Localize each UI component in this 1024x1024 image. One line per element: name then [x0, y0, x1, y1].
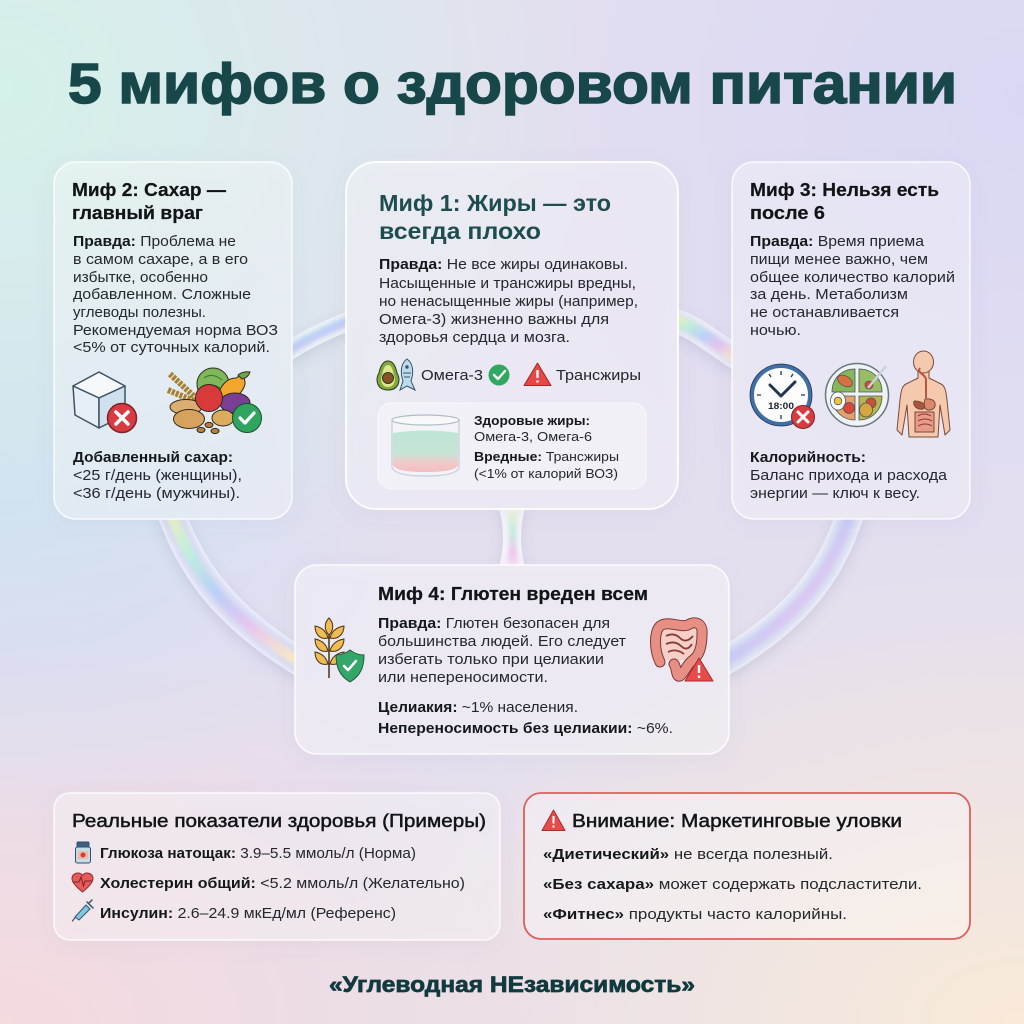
row: insulin: Инсулин: 2.6–24.9 мкЕд/мл (Референс): [100, 905, 396, 922]
text: myth 1 truth: Правда: Не все жиры одинаковы.: [379, 256, 628, 273]
panel: myth 1 fats: [346, 162, 678, 509]
icon: bottle: [76, 842, 90, 863]
panel: health indicators: [54, 793, 500, 940]
text: myth 4 truth: или непереносимости.: [378, 669, 548, 686]
row: glucose: Глюкоза натощак: 3.9–5.5 ммоль/л (Норма): [100, 845, 416, 862]
heading: myth 3: после 6: [750, 203, 825, 223]
text: myth 4 truth: Правда: Глютен безопасен для: [378, 615, 610, 632]
icon: balanced plate: [826, 364, 888, 426]
text: calories: энергии — ключ к весу.: [750, 485, 920, 502]
text: added sugar limits: <36 г/день (мужчины).: [73, 485, 240, 502]
heading: myth 2: главный враг: [72, 203, 204, 223]
icon: sugar cube with cross: [73, 372, 136, 432]
text: added sugar limits: Добавленный сахар:: [73, 449, 233, 466]
text: calories: Баланс прихода и расхода: [750, 467, 948, 484]
text: myth 3 truth: Правда: Время приема: [750, 233, 925, 250]
icon: healthy carbs with check: [168, 368, 262, 434]
row: insulin: [72, 900, 396, 922]
heading: myth 3: Миф 3: Нельзя есть: [750, 180, 939, 200]
icon: intestine with warning: [656, 623, 713, 681]
text: fats comparison: Омега-3, Омега-6: [474, 430, 592, 444]
text: myth 3 truth: ночью.: [750, 322, 801, 339]
text: marketing claims: [543, 846, 922, 923]
heading: myth 3: [750, 180, 939, 223]
icon: heart: [72, 873, 93, 892]
text: myth 1 truth: Насыщенные и трансжиры вредны,: [379, 275, 636, 292]
text: marketing claims: «Диетический» не всегда полезный.: [543, 846, 833, 863]
heading: myth 1: [379, 190, 611, 244]
text: myth 3 truth: за день. Метаболизм: [750, 286, 908, 303]
icon: avocado: [377, 361, 399, 390]
panel: myth 2 sugar: [54, 162, 292, 519]
icon: warning triangle: [524, 363, 551, 386]
text: prevalence: [378, 699, 673, 737]
text: myth 3 truth: не останавливается: [750, 304, 899, 321]
text: myth 2 truth: <5% от суточных калорий.: [73, 339, 270, 356]
text: fats comparison: (<1% от калорий ВОЗ): [474, 467, 618, 481]
text: fats comparison: [474, 414, 619, 481]
text: myth 2 truth: Рекомендуемая норма ВОЗ: [73, 322, 278, 339]
text: myth 4 truth: [378, 615, 626, 686]
icon: digestive system body: [897, 351, 950, 437]
text: added sugar limits: [73, 449, 242, 502]
text: myth 2 truth: углеводы полезны.: [73, 304, 206, 321]
text: prevalence: Целиакия: ~1% населения.: [378, 699, 578, 716]
heading: myth 4: Миф 4: Глютен вреден всем: [378, 584, 648, 604]
icon: syringe: [72, 900, 93, 921]
icon: warning triangle: [542, 810, 565, 830]
text: myth 2 truth: [73, 233, 278, 356]
text: myth 2 truth: добавленном. Сложные: [73, 286, 251, 303]
label: trans fats: Трансжиры: [556, 367, 641, 384]
text: calories: Калорийность:: [750, 449, 866, 466]
panel: marketing warning: [524, 793, 970, 939]
text: myth 3 truth: общее количество калорий: [750, 269, 955, 286]
text: myth 1 truth: но ненасыщенные жиры (например,: [379, 293, 638, 310]
heading: myth 1: Миф 1: Жиры — это: [379, 190, 611, 216]
footer brand: «Углеводная НЕзависимость»: [329, 972, 695, 997]
text: prevalence: Непереносимость без целиакии: ~6%.: [378, 720, 673, 737]
text: fats comparison: Вредные: Трансжиры: [474, 450, 619, 464]
text: myth 1 truth: [379, 256, 638, 346]
text: fats comparison: Здоровые жиры:: [474, 414, 590, 428]
text: added sugar limits: <25 г/день (женщины),: [73, 467, 242, 484]
icon: glass layered: [392, 415, 459, 476]
panel: myth 3 late eating: [732, 162, 970, 519]
text: marketing claims: «Без сахара» может содержать подсластители.: [543, 876, 922, 893]
text: myth 4 truth: большинства людей. Его следует: [378, 633, 626, 650]
text: myth 4 truth: избегать только при целиакии: [378, 651, 604, 668]
text: myth 1 truth: здоровья сердца и мозга.: [379, 329, 570, 346]
text: myth 3 truth: [750, 233, 955, 339]
text: myth 2 truth: избытке, особенно: [73, 269, 208, 286]
heading: health indicators: Реальные показатели здоровья (Примеры): [72, 811, 486, 831]
panel: myth 4 gluten: [295, 565, 729, 754]
heading: marketing warning: Внимание: Маркетинговые уловки: [572, 811, 902, 831]
icon: clock 18:00: [750, 364, 814, 428]
heading: myth 2: Миф 2: Сахар —: [72, 180, 226, 200]
iridescent connector ribbons: [168, 319, 853, 664]
icon: fish: [400, 359, 415, 390]
label: omega-3: Омега-3: [421, 367, 483, 384]
text: myth 3 truth: пищи менее важно, чем: [750, 251, 928, 268]
heading: myth 2: [72, 180, 226, 223]
text: calories: [750, 449, 948, 502]
text: myth 1 truth: Омега-3) жизненно важны для: [379, 311, 609, 328]
icon: wheat with shield: [315, 618, 364, 682]
text: marketing claims: «Фитнес» продукты часто калорийны.: [543, 906, 847, 923]
icon: clock 18:00: 18:00: [768, 401, 794, 412]
heading: myth 1: всегда плохо: [379, 218, 541, 244]
row: cholesterol: Холестерин общий: <5.2 ммоль/л (Желательно): [100, 875, 465, 892]
text: myth 2 truth: Правда: Проблема не: [73, 233, 236, 250]
icon: green check: [488, 364, 510, 386]
inset: fats glass: [378, 403, 646, 489]
text: myth 2 truth: в самом сахаре, а в его: [73, 251, 248, 268]
title: 5 мифов о здоровом питании: [68, 52, 957, 116]
